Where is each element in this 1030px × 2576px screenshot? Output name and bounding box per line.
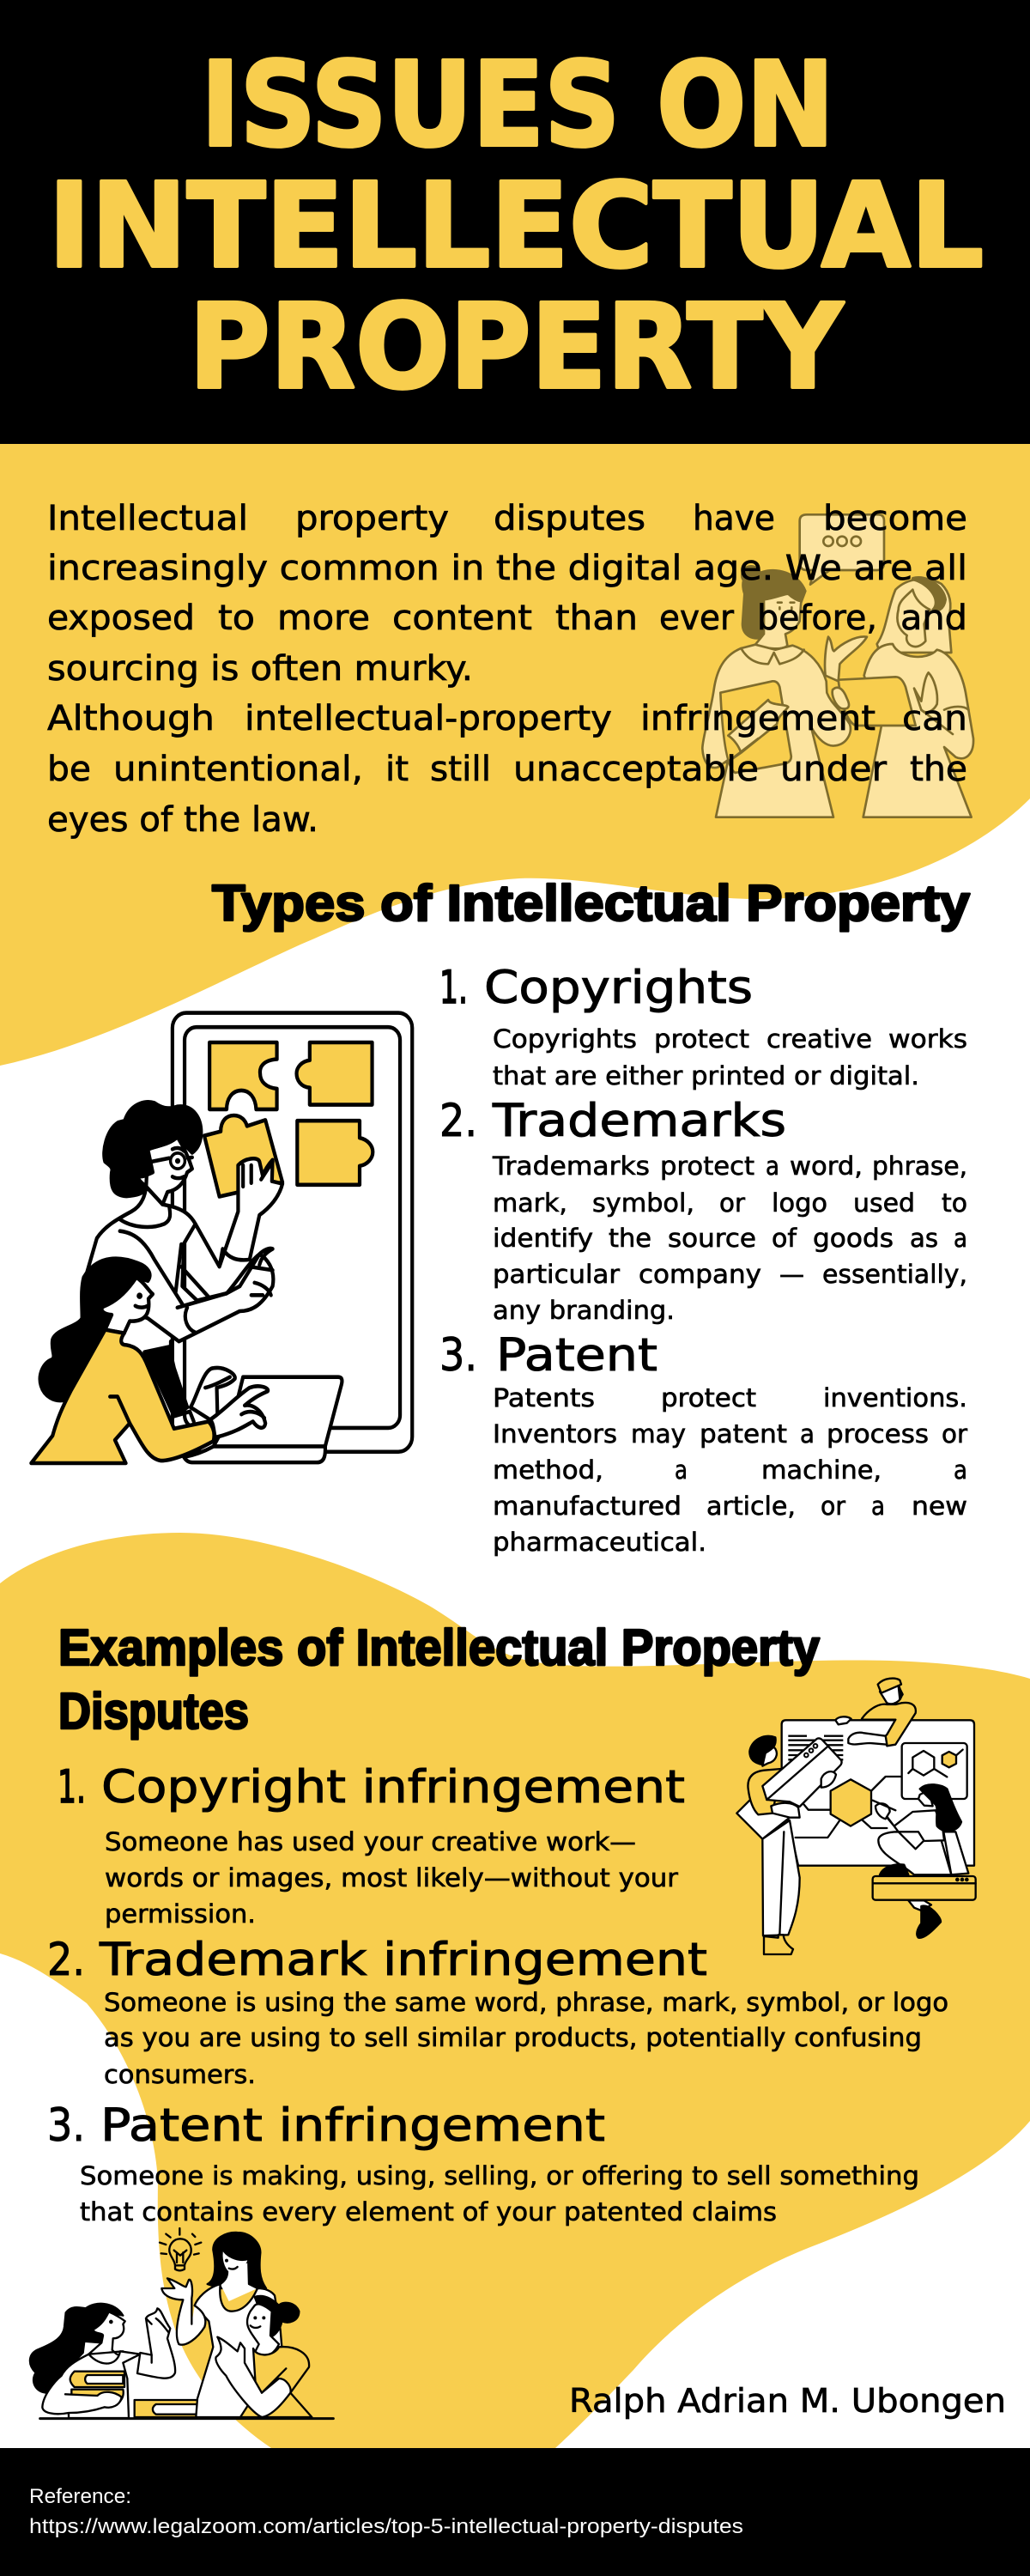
item: patent: may — [631, 1419, 686, 1449]
item: trademarks: particular — [493, 1260, 620, 1289]
item: copyright infringement: 1. — [58, 1761, 86, 1814]
item: trademarks: phrase, — [872, 1151, 967, 1181]
item: trademarks: company — [639, 1260, 761, 1289]
item: trademark infringement — [47, 1934, 948, 2089]
item: trademarks: a — [954, 1224, 967, 1253]
item: trademarks: word, — [790, 1151, 863, 1181]
intro paragraph: exposed — [47, 598, 195, 638]
illustration: team working on hexagon board — [736, 1679, 976, 1954]
item: copyrights: protect — [654, 1024, 749, 1054]
item: trademarks: — — [779, 1260, 804, 1289]
item: trademarks: Trademarks — [492, 1095, 786, 1147]
item: trademark infringement: as you are using to sell similar products, potentially confusing — [104, 2023, 922, 2052]
item: patent: pharmaceutical. — [493, 1528, 706, 1557]
item: copyright infringement: permission. — [105, 1899, 256, 1929]
heading: examples of disputes: Examples of Intellectual Property — [58, 1619, 820, 1676]
intro paragraph: to — [218, 598, 255, 638]
intro paragraph: sourcing is often murky. — [47, 649, 473, 689]
item: trademarks: symbol, — [592, 1188, 694, 1218]
item: trademarks: mark, — [493, 1188, 567, 1218]
item: trademarks: a — [766, 1151, 779, 1181]
item: patent: process — [827, 1419, 929, 1449]
item: patent: a — [954, 1455, 967, 1485]
reference text — [29, 2485, 743, 2538]
intro paragraph: ever — [659, 598, 735, 638]
item: patent: a — [800, 1419, 815, 1449]
intro paragraph: be — [47, 750, 91, 789]
intro paragraph: than — [555, 598, 638, 638]
item: patent infringement: Patent infringement — [100, 2099, 605, 2152]
intro paragraph: the — [910, 750, 967, 789]
intro paragraph: become — [823, 499, 967, 538]
intro paragraph — [47, 499, 967, 840]
item: patent: or — [942, 1419, 967, 1449]
item: patent: protect — [661, 1383, 756, 1413]
intro paragraph: and — [900, 598, 967, 638]
item: trademark infringement: Someone is using the same word, phrase, mark, symbol, or logo — [104, 1988, 948, 2017]
item: trademarks: identify — [493, 1224, 593, 1253]
item: patent: 3. — [439, 1329, 477, 1382]
intro paragraph: infringement — [640, 699, 876, 738]
item: trademarks: logo — [772, 1188, 827, 1218]
item: patent infringement: that contains every element of your patented claims — [80, 2197, 777, 2227]
intro paragraph: more — [277, 598, 370, 638]
item: trademarks: Trademarks — [492, 1151, 650, 1181]
item: patent: Patent — [496, 1329, 657, 1382]
intro paragraph: still — [430, 750, 491, 789]
item: copyrights: creative — [766, 1024, 872, 1054]
intro paragraph: property — [295, 499, 449, 538]
item: trademarks: to — [942, 1188, 967, 1218]
intro paragraph: Although — [47, 699, 215, 738]
item: trademarks: or — [719, 1188, 745, 1218]
intro paragraph: unintentional, — [113, 750, 363, 789]
item: copyright infringement: words or images, most likely—without your — [105, 1863, 678, 1893]
section: types list — [439, 962, 967, 1557]
author name: Ralph Adrian M. Ubongen — [569, 2382, 1006, 2420]
item: patent: a — [675, 1455, 688, 1485]
footer band — [0, 2448, 1030, 2576]
item: trademark infringement: consumers. — [104, 2060, 256, 2089]
item: patent: a — [871, 1492, 885, 1521]
item: patent — [439, 1329, 967, 1557]
intro paragraph: have — [693, 499, 775, 538]
reference text: https://www.legalzoom.com/articles/top-5-intellectual-property-disputes — [29, 2515, 743, 2538]
background: top yellow blob — [0, 444, 1030, 1066]
intro paragraph: under — [780, 750, 888, 789]
item: copyrights: works — [888, 1024, 967, 1054]
intro paragraph: before, — [757, 598, 877, 638]
item: patent: manufactured — [493, 1492, 682, 1521]
item: trademarks: any branding. — [493, 1296, 675, 1325]
item: patent: or — [821, 1492, 845, 1521]
item: patent infringement: Someone is making, using, selling, or offering to sell something — [80, 2161, 919, 2190]
item: trademark infringement: 2. — [47, 1934, 85, 1986]
item: patent: new — [912, 1492, 967, 1521]
heading: examples of disputes: Disputes — [58, 1683, 249, 1740]
reference text: Reference: — [29, 2485, 131, 2508]
item: copyrights: Copyrights — [484, 962, 753, 1014]
intro paragraph: eyes of the law. — [47, 800, 318, 840]
item: copyright infringement: Someone has used your creative work— — [105, 1827, 636, 1856]
item: copyrights: Copyrights — [493, 1024, 637, 1054]
title — [48, 38, 984, 416]
item: patent: patent — [700, 1419, 787, 1449]
item: patent: article, — [706, 1492, 796, 1521]
intro paragraph: Intellectual — [47, 499, 248, 538]
intro paragraph: disputes — [494, 499, 645, 538]
heading: types of intellectual property: Types of Intellectual Property — [212, 875, 970, 932]
intro paragraph: can — [902, 699, 967, 738]
intro paragraph: content — [392, 598, 532, 638]
heading: examples of disputes — [58, 1619, 820, 1740]
intro paragraph: unacceptable — [513, 750, 759, 789]
item: copyright infringement: Copyright infringement — [101, 1761, 685, 1814]
item: patent: Patents — [493, 1383, 595, 1413]
intro paragraph: it — [385, 750, 409, 789]
background: lower yellow blob — [0, 1533, 1030, 2448]
item: trademarks: as — [910, 1224, 938, 1253]
title: PROPERTY — [189, 280, 844, 416]
item: trademark infringement: Trademark infringement — [99, 1934, 707, 1986]
item: copyright infringement — [58, 1761, 685, 1929]
illustration: two women assembling puzzle on tablet — [31, 1013, 412, 1463]
illustration: three women with books and idea bulb — [30, 2228, 333, 2419]
header band — [0, 0, 1030, 444]
item: patent: method, — [493, 1455, 603, 1485]
item: patent: Inventors — [493, 1419, 617, 1449]
intro paragraph: intellectual-property — [245, 699, 612, 738]
item: trademarks: protect — [660, 1151, 754, 1181]
item: patent: machine, — [761, 1455, 882, 1485]
item: copyrights — [439, 962, 967, 1091]
item: trademarks: source — [668, 1224, 756, 1253]
item: copyrights: that are either printed or digital. — [493, 1061, 919, 1091]
item: trademarks: of — [772, 1224, 797, 1253]
item: trademarks: the — [609, 1224, 651, 1253]
title: INTELLECTUAL — [48, 159, 984, 295]
section: disputes list — [47, 1761, 948, 2227]
item: patent infringement — [47, 2099, 919, 2227]
item: trademarks: used — [853, 1188, 915, 1218]
illustration: two women talking with tablets — [702, 514, 973, 817]
item: trademarks: essentially, — [822, 1260, 967, 1289]
item: trademarks: goods — [813, 1224, 894, 1253]
item: patent: inventions. — [823, 1383, 967, 1413]
item: trademarks — [439, 1095, 967, 1325]
item: copyrights: 1. — [439, 962, 468, 1014]
item: trademarks: 2. — [439, 1095, 477, 1147]
intro paragraph: increasingly common in the digital age. We are all — [47, 549, 967, 588]
item: patent infringement: 3. — [47, 2099, 85, 2152]
title: ISSUES ON — [201, 38, 834, 173]
